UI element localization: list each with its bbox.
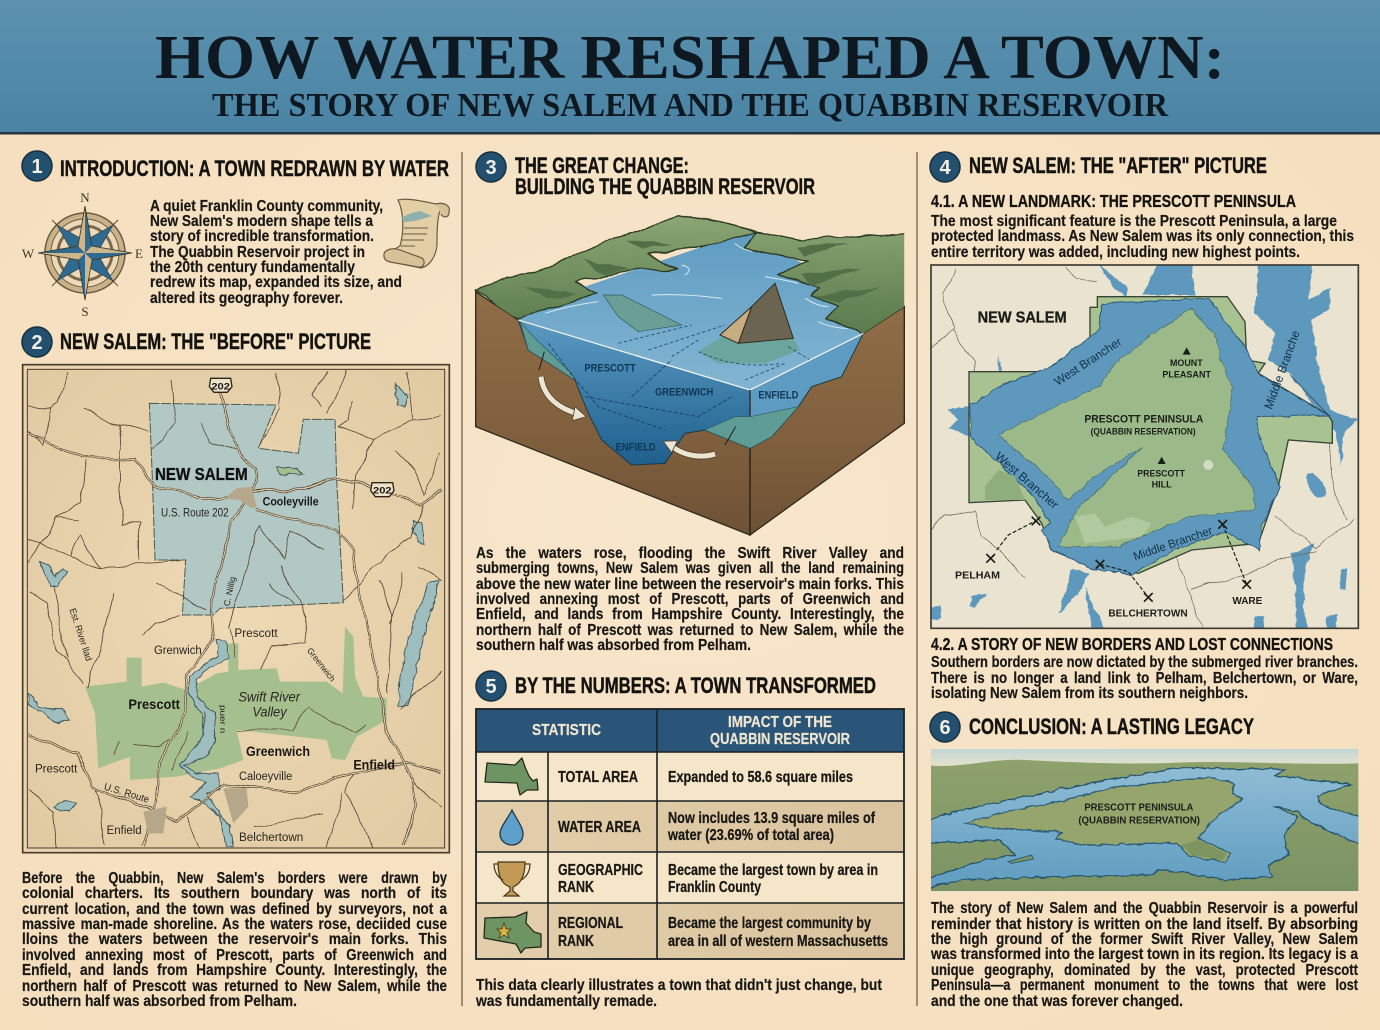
- row labels: TOTAL AREA: [558, 769, 638, 786]
- row labels: WATER AREA: [558, 819, 641, 836]
- table header: STATISTIC: [532, 722, 601, 739]
- photo landscape layers: [928, 768, 1362, 888]
- map labels: PLEASANT: [1162, 369, 1211, 379]
- before text: southern half was absorbed from Pelham.: [22, 993, 297, 1010]
- map: New Salem before the reservoir: [23, 365, 449, 853]
- map labels: Greenwich: [246, 743, 310, 759]
- badge 3: 3: [485, 157, 497, 179]
- arrow: left bank: [541, 377, 586, 421]
- subheading 4.1: 4.1. A NEW LANDMARK: THE PRESCOTT PENINSULA: [931, 191, 1296, 211]
- water cross section, left: [518, 320, 750, 465]
- map labels: (QUABBIN RESERVATION): [1091, 426, 1196, 436]
- island peak: [720, 283, 793, 343]
- row values: Became the largest community by: [668, 915, 871, 932]
- great change text: above the new water line between the reservoir's main forks. This: [476, 576, 904, 593]
- shield: route 202 east: [371, 483, 394, 497]
- row values: water (23.69% of total area): [667, 827, 834, 844]
- left soil face: [476, 292, 750, 535]
- water surface: [518, 230, 863, 390]
- reservoir water: [928, 768, 1362, 888]
- reservation land area: [969, 297, 1332, 573]
- map labels: Belchertown: [239, 830, 303, 844]
- shield: route 202 east: 202: [373, 485, 392, 495]
- New Salem town area: [149, 403, 343, 615]
- photo label: (QUABBIN RESERVATION): [1078, 815, 1200, 826]
- before text: northern half of Prescott was returned to New Salem, while the: [22, 978, 447, 995]
- great change text: northern half of Prescott was returned to New Salem, while the: [476, 622, 904, 639]
- section 3: the great change: [476, 152, 912, 654]
- submerged slope: [603, 295, 682, 332]
- political borders and roads: [932, 267, 1355, 627]
- map labels: Swift River: [238, 689, 301, 705]
- conclusion text: [930, 900, 1358, 1010]
- section 5: by the numbers: [475, 671, 904, 1010]
- photo label: PRESCOTT PENINSULA: [1084, 803, 1193, 814]
- map labels: NEW SALEM: [155, 464, 248, 484]
- row labels: [558, 769, 643, 950]
- shield: route 202: 202: [211, 381, 230, 391]
- map drawing layers: [932, 263, 1357, 630]
- row values: Franklin County: [668, 879, 761, 896]
- header banner: [0, 0, 1380, 134]
- table caption: was fundamentally remade.: [475, 993, 657, 1010]
- map labels: puer n: [218, 705, 227, 733]
- map labels: PRESCOTT: [1137, 469, 1185, 479]
- icon: compass rose: N: [80, 190, 90, 205]
- heading 3: BUILDING THE QUABBIN RESERVOIR: [515, 174, 815, 199]
- heading 3: THE GREAT CHANGE:: [515, 153, 689, 178]
- arrow: bottom: [663, 441, 715, 456]
- heading 1: INTRODUCTION: A TOWN REDRAWN BY WATER: [60, 156, 449, 181]
- intro text: The Quabbin Reservoir project in: [150, 244, 365, 261]
- before text: current location, and the town was defined by surveyors, not a: [22, 901, 447, 918]
- heading 5: BY THE NUMBERS: A TOWN TRANSFORMED: [515, 673, 876, 698]
- map labels: Enfield: [107, 823, 142, 837]
- badge 3: [476, 152, 506, 182]
- icon: trophy: [494, 862, 530, 896]
- before text: involved annexing most of Prescott, parts of Greenwich and: [22, 947, 447, 964]
- before text: massive man-made shoreline. As the waters rose, deciided cuse: [22, 916, 447, 933]
- map: Prescott Peninsula after the reservoir: [931, 263, 1358, 630]
- road network: [28, 370, 442, 847]
- submerged banks: [520, 322, 798, 448]
- row values: Expanded to 58.6 square miles: [668, 769, 853, 786]
- map labels: Middle Brancher: [1131, 523, 1214, 564]
- map labels: WARE: [1232, 596, 1263, 607]
- subtitle: THE STORY OF NEW SALEM AND THE QUABBIN RESERVOIR: [212, 87, 1168, 124]
- map labels: BELCHERTOWN: [1108, 609, 1188, 620]
- badge 1: [22, 151, 52, 181]
- Swift River Valley green area: [85, 627, 387, 780]
- green land surface: [476, 213, 912, 333]
- map labels: Cooleyville: [263, 495, 319, 509]
- map labels: Prescott: [35, 762, 78, 776]
- badge 4: [930, 152, 960, 182]
- row values: Became the largest town by area in: [668, 862, 878, 879]
- underwater mound: [698, 337, 800, 363]
- icon: compass rose: E: [135, 246, 143, 261]
- block labels: GREENWICH: [655, 387, 713, 399]
- map labels: [35, 464, 395, 844]
- intro text: story of incredible transformation.: [150, 228, 374, 245]
- great change text: As the waters rose, flooding the Swift River Valley and: [476, 545, 904, 562]
- great change text: submerging towns, New Salem was given all the land remaining: [476, 560, 904, 577]
- map labels: [955, 309, 1303, 620]
- text 4.1: [931, 213, 1354, 261]
- conclusion text: and the one that was forever changed.: [931, 993, 1183, 1010]
- water cross section, right: [750, 333, 863, 448]
- icon: compass rose: [22, 190, 143, 319]
- map labels: Grenwich: [154, 643, 202, 657]
- intro text: altered its geography forever.: [150, 290, 343, 307]
- intro text: New Salem's modern shape tells a: [150, 213, 373, 230]
- section 2: before picture: [22, 327, 449, 1010]
- map labels: Valley: [252, 704, 288, 720]
- section 6: conclusion: [928, 712, 1362, 1010]
- town settlements: [143, 487, 257, 833]
- heading 3: [515, 153, 815, 199]
- map labels: U.S. Route 202: [161, 506, 229, 520]
- map labels: NEW SALEM: [978, 309, 1067, 326]
- text 4.2: [931, 654, 1358, 702]
- intro text: the 20th century fundamentally: [150, 259, 355, 276]
- block labels: ENFIELD: [616, 442, 656, 454]
- icon: Massachusetts map with star: [484, 912, 541, 953]
- map labels: Middle Branche: [1261, 328, 1303, 411]
- map labels: U.S. Route: [102, 782, 151, 806]
- diagram: reservoir block cutaway: [476, 213, 912, 535]
- photo label: [1078, 803, 1200, 826]
- heading 6: CONCLUSION: A LASTING LEGACY: [969, 714, 1254, 739]
- before text: colonial charters. Its southern boundary was north of its: [22, 885, 447, 902]
- section 4: after picture: [930, 152, 1358, 702]
- row labels: RANK: [558, 933, 595, 950]
- heading 2: NEW SALEM: THE "BEFORE" PICTURE: [60, 329, 371, 354]
- map labels: Caloeyville: [239, 769, 293, 783]
- icon: compass rose: W: [22, 246, 35, 261]
- before text: [22, 870, 447, 1010]
- icon: compass rose: S: [81, 304, 89, 319]
- block labels: ENFIELD: [758, 389, 799, 401]
- map drawing layers: [28, 370, 442, 847]
- before text: lloins the waters between the reservoir's main forks. This: [22, 931, 447, 948]
- aerial view of the peninsula: [928, 749, 1362, 892]
- map labels: Prescott: [234, 626, 278, 640]
- map labels: Greenwich: [305, 646, 338, 684]
- badge 2: 2: [31, 332, 43, 354]
- row values: [667, 769, 888, 950]
- great change text: [476, 545, 904, 654]
- intro text: redrew its map, expanded its size, and: [150, 274, 402, 291]
- map labels: HILL: [1152, 480, 1172, 490]
- badge 5: 5: [485, 676, 497, 698]
- title: HOW WATER RESHAPED A TOWN:: [155, 24, 1225, 92]
- section 1: introduction: [22, 151, 449, 319]
- map labels: PELHAM: [955, 570, 1000, 581]
- rivers and lakes: [28, 384, 438, 847]
- intro text: [150, 198, 402, 307]
- table caption: [475, 977, 882, 1010]
- map labels: West Brancher: [1052, 335, 1124, 389]
- peninsula: [965, 777, 1242, 862]
- before text: Enfield, and lands from Hampshire County. Interestingly, the: [22, 962, 447, 979]
- badge 4: 4: [939, 157, 951, 179]
- table header: [532, 714, 850, 748]
- map labels: MOUNT: [1170, 358, 1203, 368]
- icon: water drop: [500, 810, 523, 845]
- badge 1: 1: [31, 156, 43, 178]
- peninsula land: [998, 308, 1255, 547]
- reservoir water: [970, 298, 1328, 575]
- text 4.1: The most significant feature is the Prescott Peninsula, a large: [931, 213, 1337, 230]
- map labels: Est. River llad: [67, 607, 94, 662]
- table caption: This data clearly illustrates a town that didn't just change, but: [476, 977, 882, 994]
- row labels: REGIONAL: [558, 915, 623, 932]
- text 4.2: isolating New Salem from its southern neighbors.: [931, 685, 1248, 702]
- badge 6: [930, 712, 960, 742]
- map labels: Prescott: [128, 696, 180, 712]
- right soil face: [750, 307, 904, 535]
- statistics table: [476, 709, 904, 959]
- icon: Massachusetts map: [485, 758, 538, 795]
- intro text: A quiet Franklin County community,: [150, 198, 383, 215]
- great change text: Enfield, and lands from Hampshire County. Interestingly, the: [476, 606, 904, 623]
- row values: Now includes 13.9 square miles of: [668, 810, 876, 827]
- heading 4: NEW SALEM: THE "AFTER" PICTURE: [969, 153, 1267, 178]
- map labels: C. Nillig: [222, 575, 238, 607]
- badge 2: [22, 327, 52, 357]
- block labels: PRESCOTT: [584, 363, 636, 375]
- row labels: RANK: [558, 879, 595, 896]
- map labels: PRESCOTT PENINSULA: [1084, 414, 1203, 426]
- row values: area in all of western Massachusetts: [668, 933, 888, 950]
- before text: Before the Quabbin, New Salem's borders were drawn by: [22, 870, 447, 887]
- map labels: Enfield: [353, 756, 395, 772]
- block labels: [584, 363, 799, 454]
- crossed-out links: [986, 517, 1251, 602]
- great change text: involved annexing most of Prescott, parts of Greenwich and: [476, 591, 904, 608]
- text 4.1: entire territory was added, including new highest points.: [931, 244, 1300, 261]
- table header: QUABBIN RESERVOIR: [710, 731, 850, 748]
- badge 6: 6: [939, 717, 951, 739]
- shield: route 202: [209, 378, 232, 392]
- badge 5: [476, 671, 506, 701]
- icon: parchment scroll: [384, 199, 449, 268]
- great change text: southern half was absorbed from Pelham.: [476, 637, 751, 654]
- table header: IMPACT OF THE: [728, 714, 832, 731]
- map labels: West Brancher: [992, 449, 1061, 512]
- outlying waters: [932, 263, 1357, 630]
- peak markers: [1158, 347, 1191, 464]
- row labels: GEOGRAPHIC: [558, 862, 643, 879]
